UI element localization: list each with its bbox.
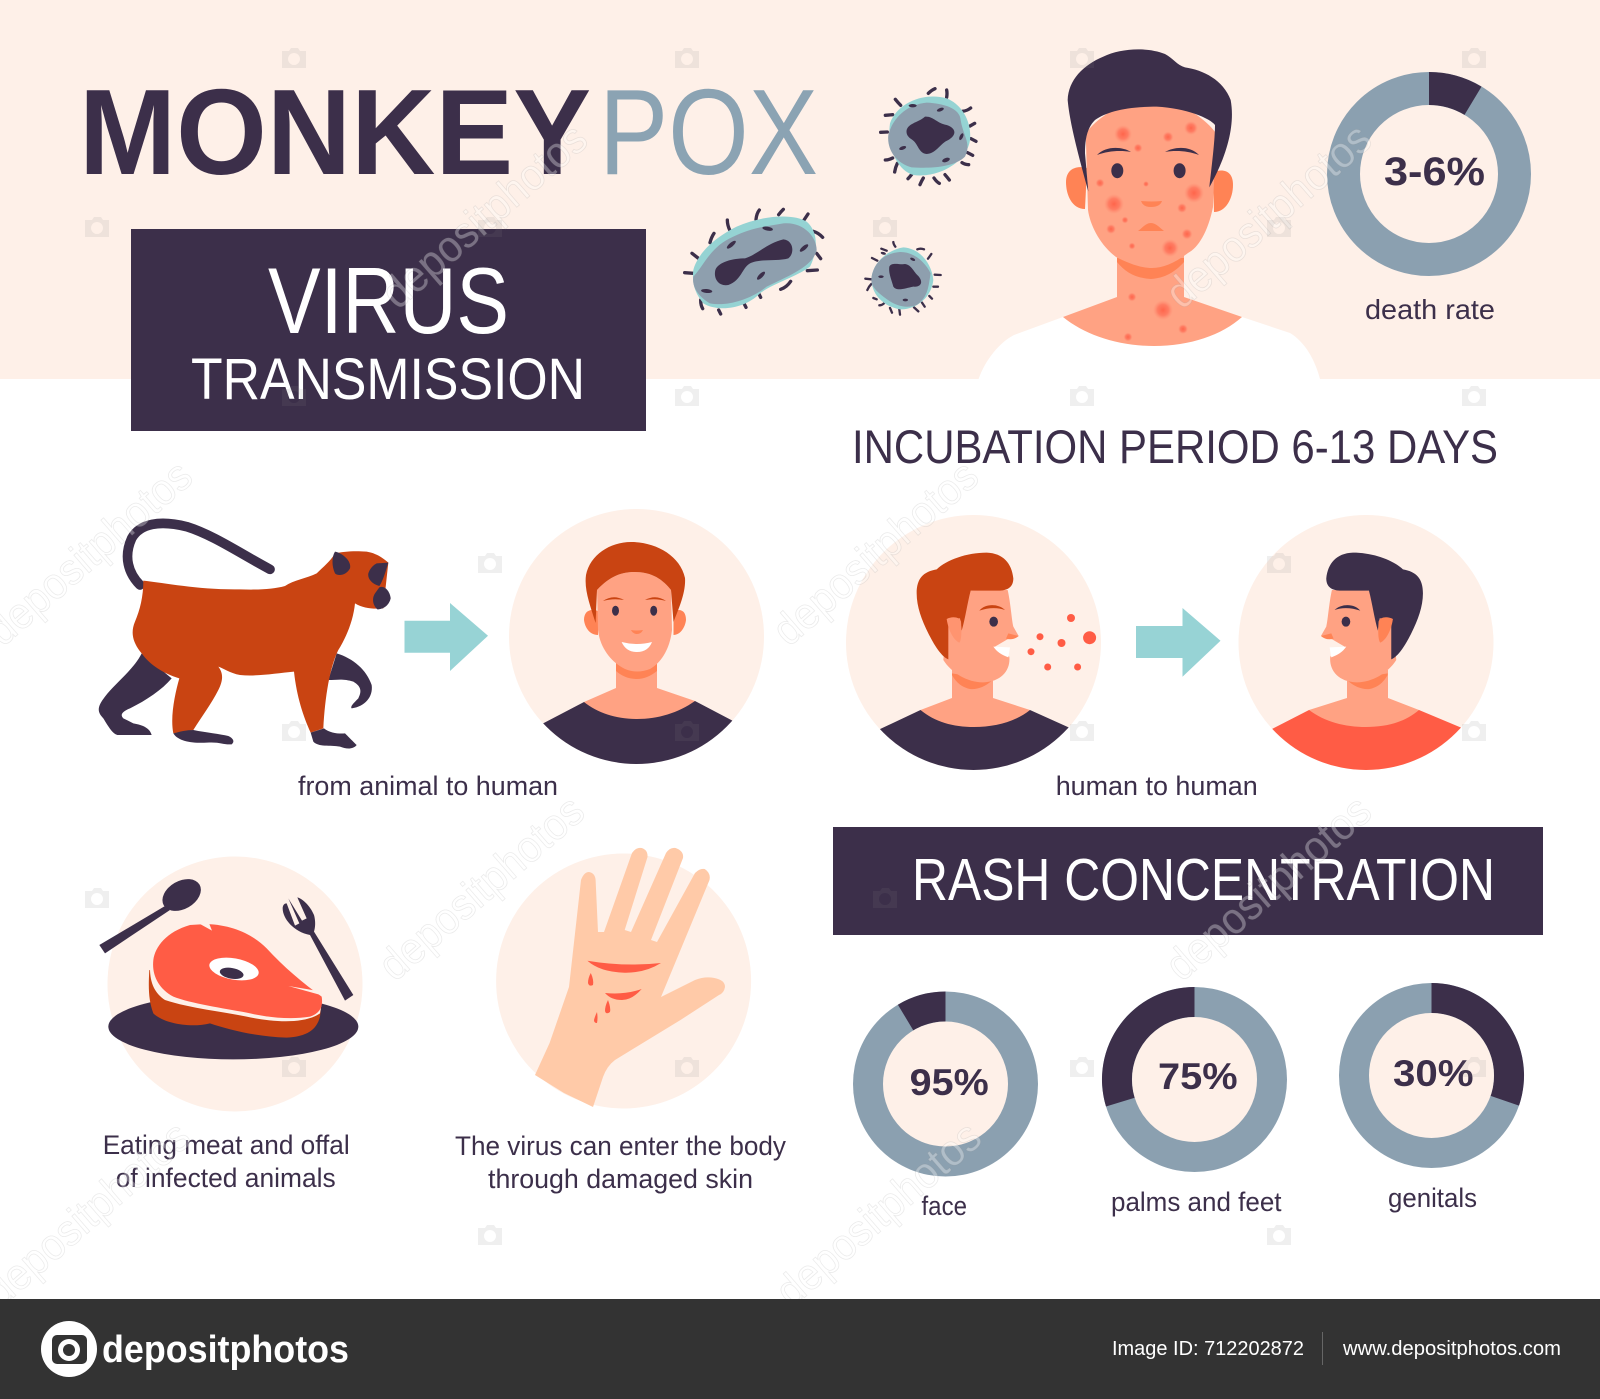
chart: face 95% donut xyxy=(853,992,1038,1176)
watermarks: depositphotos xyxy=(369,786,594,990)
chart: palms and feet 75% donut: 75% xyxy=(1158,1056,1238,1097)
header band xyxy=(0,0,1600,379)
cuts and blood drops xyxy=(587,961,661,1023)
watermarks: depositphotos xyxy=(1156,114,1381,318)
arrow: animal to human xyxy=(404,603,488,671)
logo: depositphotos camera xyxy=(41,1321,97,1377)
hair xyxy=(1068,49,1232,192)
chart: death rate donut: 3-6% xyxy=(1384,150,1485,194)
ears xyxy=(1066,167,1087,209)
body xyxy=(133,551,388,733)
arrow: human to human xyxy=(1136,608,1220,677)
icon: elongated virus xyxy=(685,209,823,314)
logo wordmark: depositphotos xyxy=(102,1329,349,1371)
label: face: face xyxy=(922,1191,967,1221)
website: www.depositphotos.com xyxy=(1342,1338,1561,1360)
label: eating meat: of infected animals xyxy=(116,1163,336,1193)
illustration: meat on plate xyxy=(99,856,362,1112)
spoon xyxy=(99,873,207,953)
back leg xyxy=(99,653,172,735)
rash spots xyxy=(1096,121,1204,342)
fat line xyxy=(150,960,322,1021)
panel: rash concentration heading: RASH CONCENTRATION xyxy=(912,847,1495,913)
icons: virus particles xyxy=(685,89,976,315)
heading: incubation period: INCUBATION PERIOD 6-13 DAYS xyxy=(852,420,1498,473)
image id: Image ID: 712202872 xyxy=(1112,1338,1304,1360)
face xyxy=(1086,100,1216,268)
chart: death rate donut xyxy=(1344,72,1514,260)
label: death rate: death rate xyxy=(1365,294,1495,325)
chart: palms and feet 75% donut xyxy=(1102,987,1287,1172)
neck shadow xyxy=(1117,258,1184,279)
label: genitals: genitals xyxy=(1388,1183,1477,1213)
fork xyxy=(283,897,353,1001)
label: from animal to human: from animal to human xyxy=(298,771,558,801)
illustration: healthy man avatar xyxy=(1238,515,1494,775)
panel: rash concentration heading xyxy=(833,827,1543,935)
illustration: monkey xyxy=(99,523,391,748)
illustration: sneezing man avatar xyxy=(846,515,1101,775)
panel: virus transmission heading: TRANSMISSION xyxy=(191,347,585,412)
title: MONKEY xyxy=(79,64,591,200)
front arm xyxy=(328,653,372,708)
illustration: damaged hand xyxy=(496,848,751,1108)
label: eating meat xyxy=(103,1130,350,1193)
nose and lips xyxy=(1141,201,1162,207)
label: virus through skin xyxy=(455,1131,786,1194)
panel: virus transmission heading xyxy=(131,229,646,431)
watermark camera icons xyxy=(85,48,1486,1245)
label: palms and feet: palms and feet xyxy=(1111,1187,1282,1217)
chart: face 95% donut: 95% xyxy=(910,1062,989,1103)
watermarks: depositphotos xyxy=(766,1112,991,1316)
label: virus through skin: The virus can enter the body xyxy=(455,1131,786,1161)
plate xyxy=(108,994,358,1059)
chart: genitals 30% donut xyxy=(1339,983,1524,1168)
shoulders and neck xyxy=(1063,250,1242,346)
watermarks: depositphotos xyxy=(763,451,988,655)
illustration: smiling man avatar xyxy=(509,509,764,770)
meat top xyxy=(153,924,322,1018)
icon: round virus top xyxy=(881,89,976,185)
bone xyxy=(208,954,260,984)
meat side xyxy=(149,970,322,1038)
white shirt xyxy=(979,317,1320,379)
label: eating meat: Eating meat and offal xyxy=(103,1130,350,1160)
watermarks: depositphotos xyxy=(372,114,597,318)
label: human to human: human to human xyxy=(1056,771,1258,801)
feet xyxy=(173,730,233,744)
label: virus through skin: through damaged skin xyxy=(488,1164,753,1194)
watermarks: depositphotos xyxy=(1156,786,1381,990)
eyes and brows xyxy=(1097,148,1199,178)
tail xyxy=(128,523,270,585)
droplets xyxy=(1028,614,1096,670)
icon: small virus xyxy=(865,242,941,315)
chart: genitals 30% donut: 30% xyxy=(1393,1053,1474,1094)
footer bar xyxy=(0,1299,1600,1399)
illustration: man with rash xyxy=(979,49,1320,379)
panel: virus transmission heading: VIRUS xyxy=(268,248,509,353)
title: POX xyxy=(599,64,818,200)
ear and face xyxy=(332,552,391,609)
watermarks xyxy=(0,114,1381,1316)
